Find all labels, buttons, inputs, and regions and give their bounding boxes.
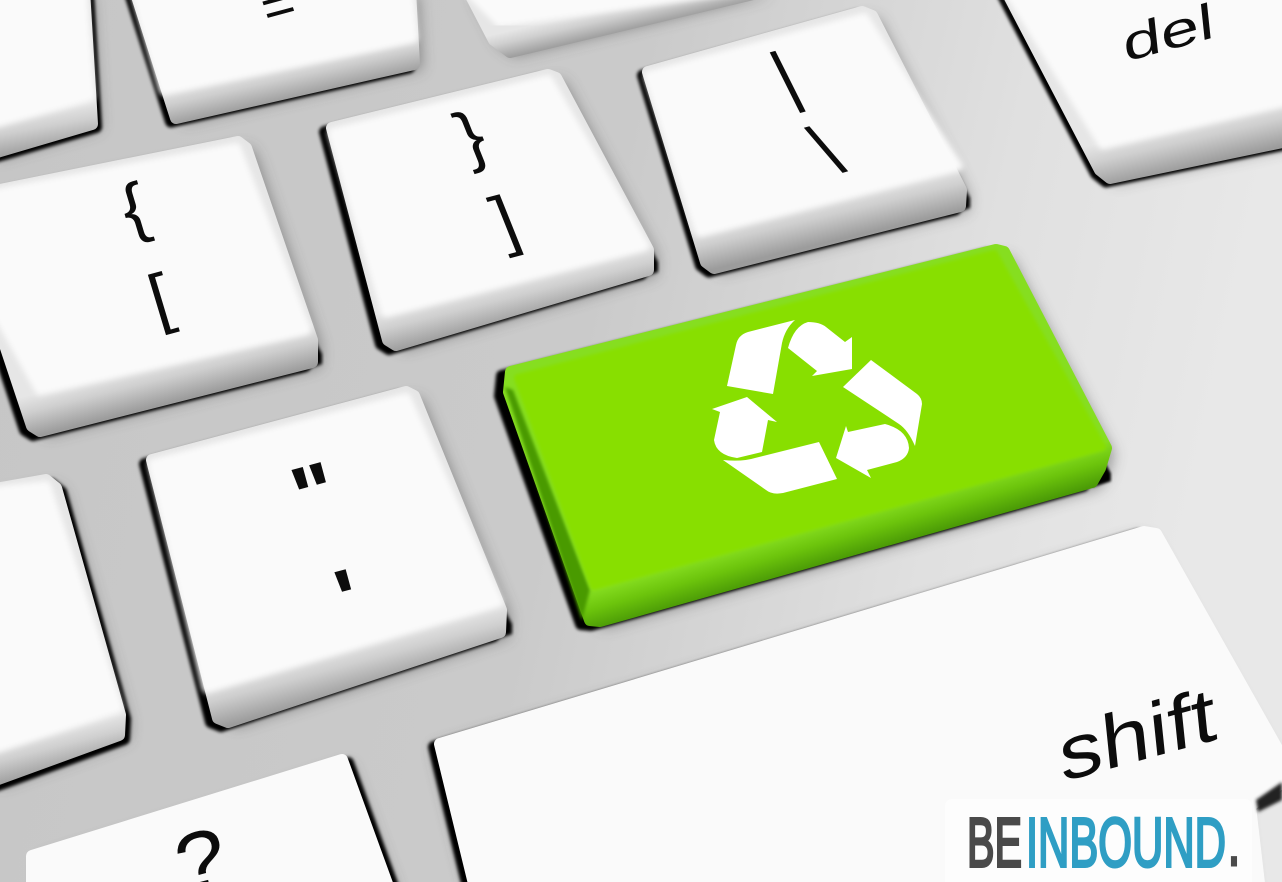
key: right brace and bracket: ] [481,182,529,260]
key: left-middle partial [0,480,129,787]
key: equals [130,0,422,123]
key: question mark [32,760,398,882]
logo: BeInbound [945,799,1252,882]
key: quotes [145,392,512,727]
key: del [1002,0,1282,183]
logo: BeInbound: . [1228,804,1240,882]
key: braces and brackets: [ [139,259,181,337]
key: slash and backslash: \ [798,110,855,190]
icon: recycle arrows [712,320,922,494]
key: shift: shift [1055,671,1220,799]
key: slash and backslash [643,12,970,273]
key: quotes: " [280,444,350,544]
key: shift [434,532,1282,882]
key: slash and backslash: | [758,39,812,115]
key: braces and brackets [0,142,322,436]
key: top-left partial [0,0,100,159]
key: right brace and bracket: } [445,97,497,176]
key: braces and brackets: { [111,168,156,247]
key: quotes: ' [324,551,374,646]
logo: BeInbound: BE [967,804,1022,882]
key: top-middle partial [468,0,774,56]
key: green recycle [500,250,1114,627]
key: right brace and bracket [325,75,658,350]
